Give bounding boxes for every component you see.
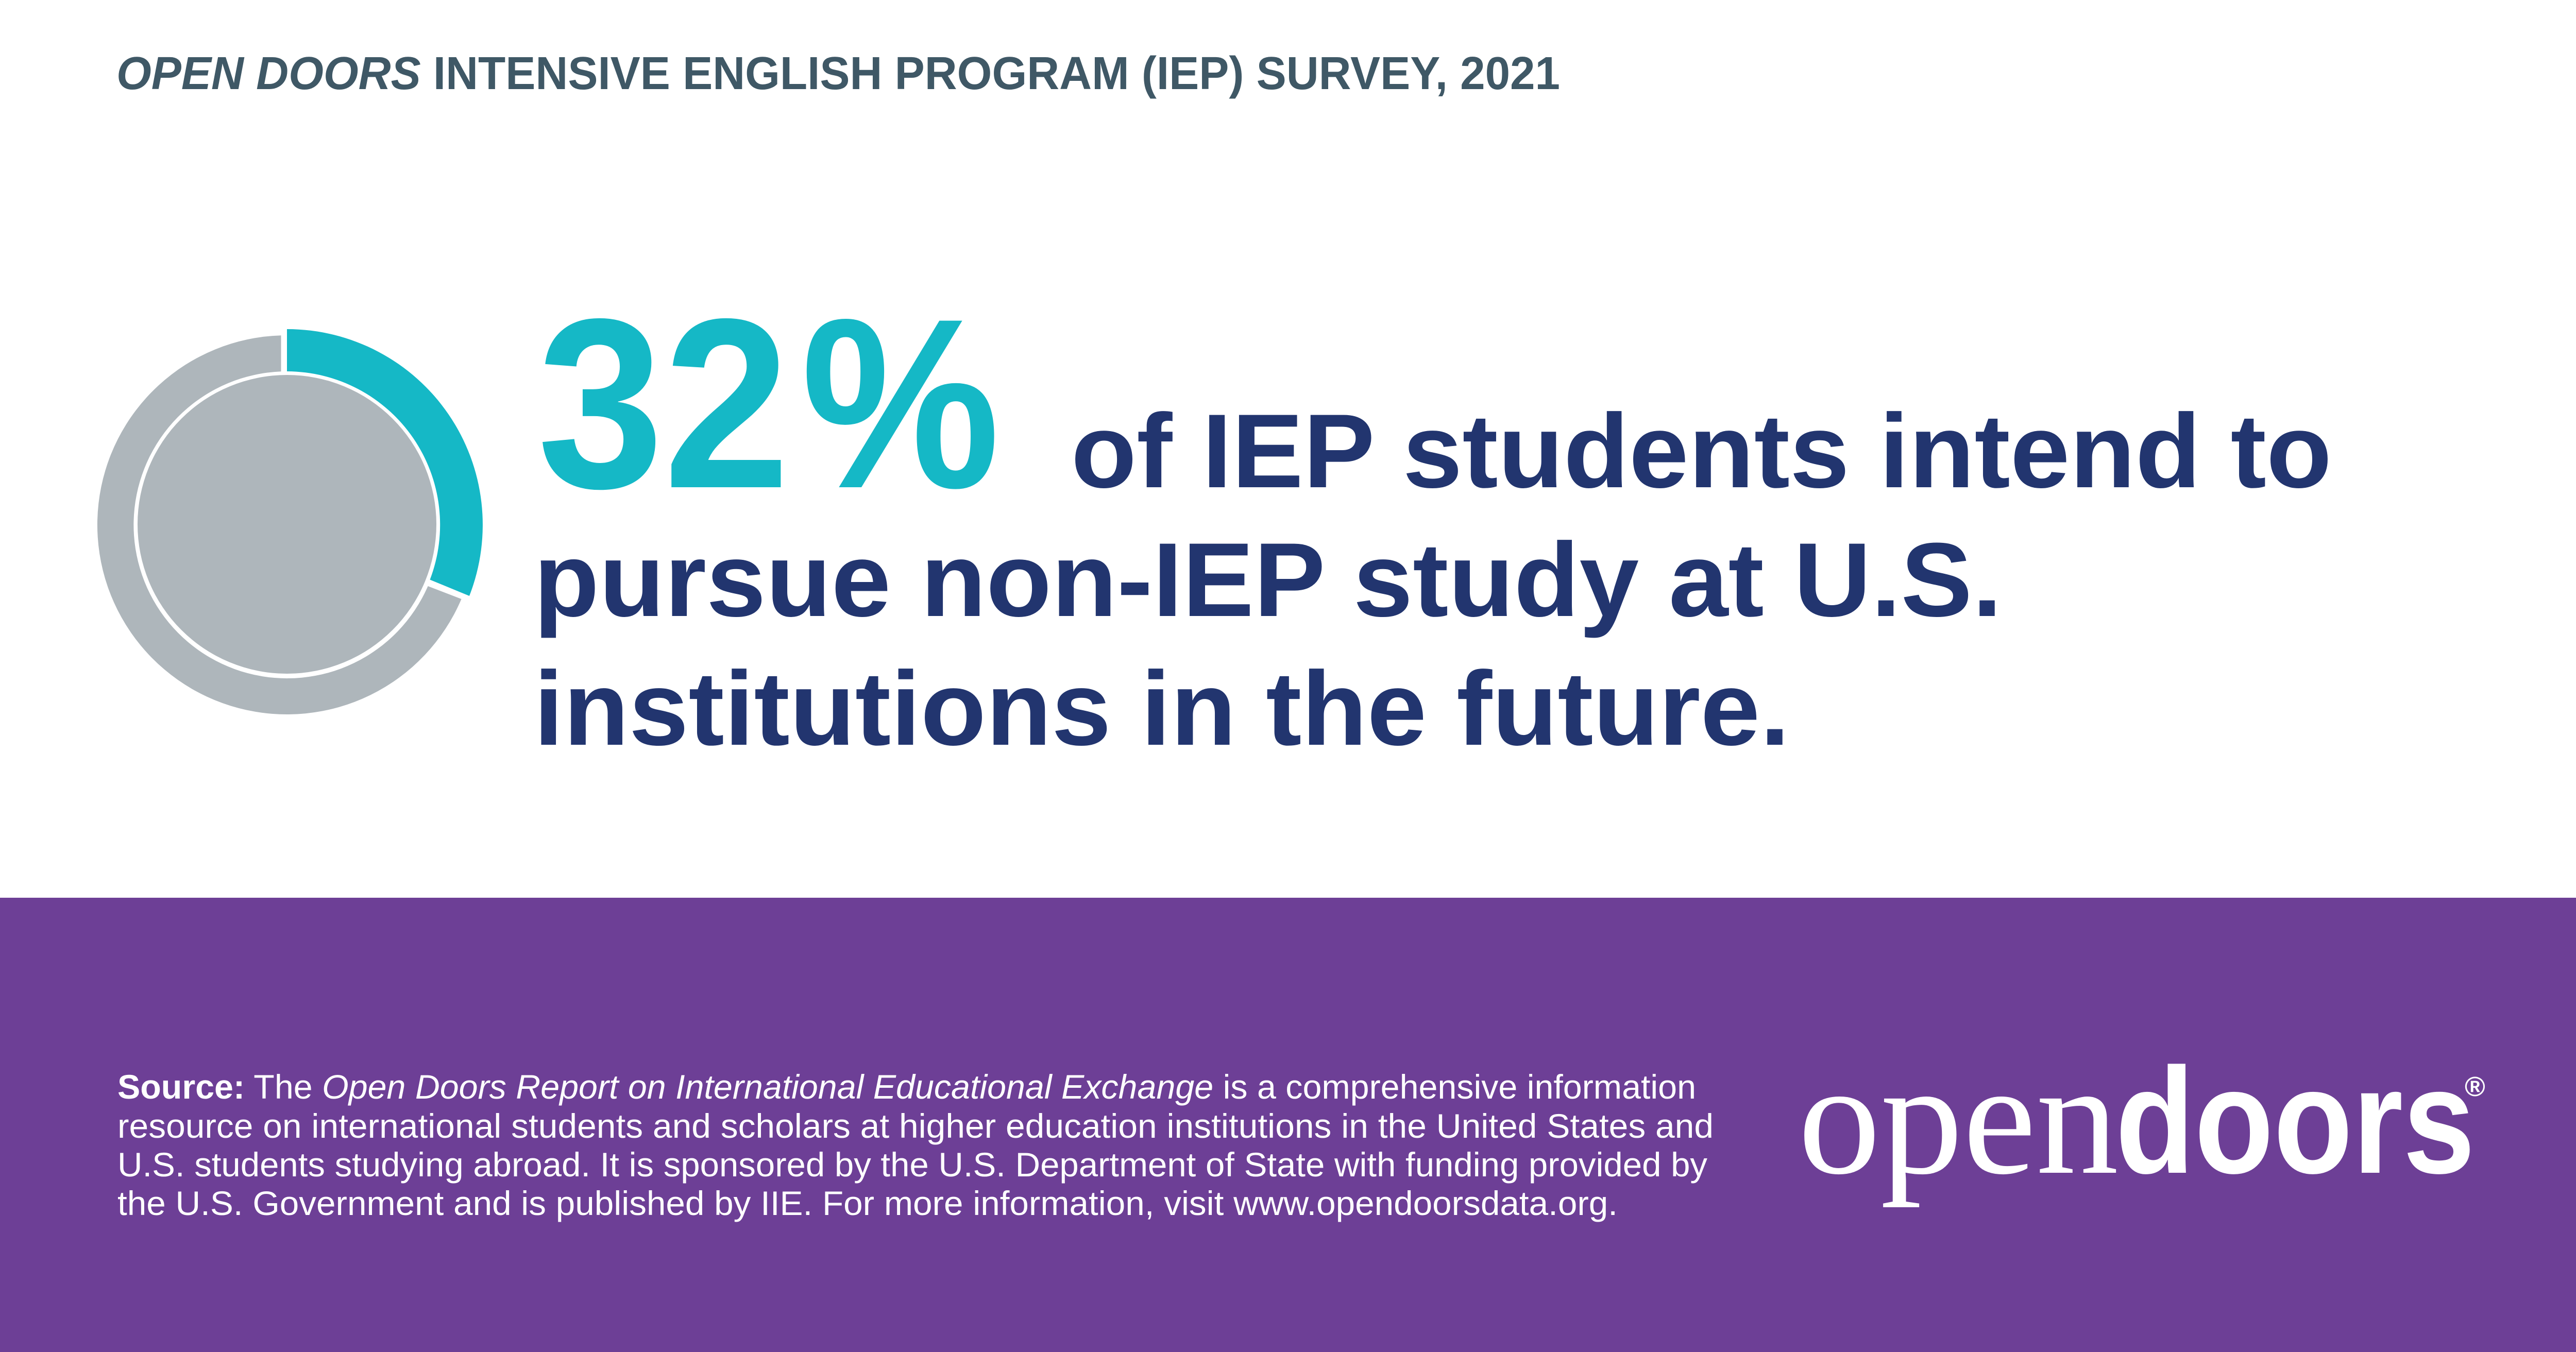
footer band	[0, 898, 2576, 1352]
headline line 1: of IEP students intend to	[1071, 392, 2332, 510]
source line 3: U.S. students studying abroad. It is sponsored by the U.S. Department of State with funding provided by	[117, 1145, 1707, 1184]
remaining share ring	[97, 335, 462, 714]
headline statement	[534, 268, 2332, 767]
32% share ring	[287, 329, 483, 596]
source line 2: resource on international students and scholars at higher education institutions in the United States and	[117, 1107, 1714, 1145]
opendoors logo	[1798, 1029, 2485, 1208]
logo word: doors: doors	[2115, 1037, 2475, 1205]
source line 4: the U.S. Government and is published by IIE. For more information, visit www.opendoorsdata.org.	[117, 1184, 1618, 1222]
registered mark: ®	[2465, 1071, 2485, 1102]
donut chart: 32%	[97, 329, 483, 714]
source line 1: Source: The Open Doors Report on International Educational Exchange is a comprehensive information	[117, 1068, 1696, 1106]
headline line 3: institutions in the future.	[534, 650, 1790, 767]
big figure: 32%: %	[801, 268, 1000, 539]
logo word: open: open	[1798, 1029, 2119, 1208]
title: OPEN DOORS INTENSIVE ENGLISH PROGRAM (IEP) SURVEY, 2021	[116, 48, 1560, 99]
headline line 2: pursue non-IEP study at U.S.	[534, 521, 2002, 639]
centre disc	[138, 375, 436, 674]
big figure: 32%: 32	[537, 268, 790, 539]
source note	[117, 1068, 1714, 1222]
